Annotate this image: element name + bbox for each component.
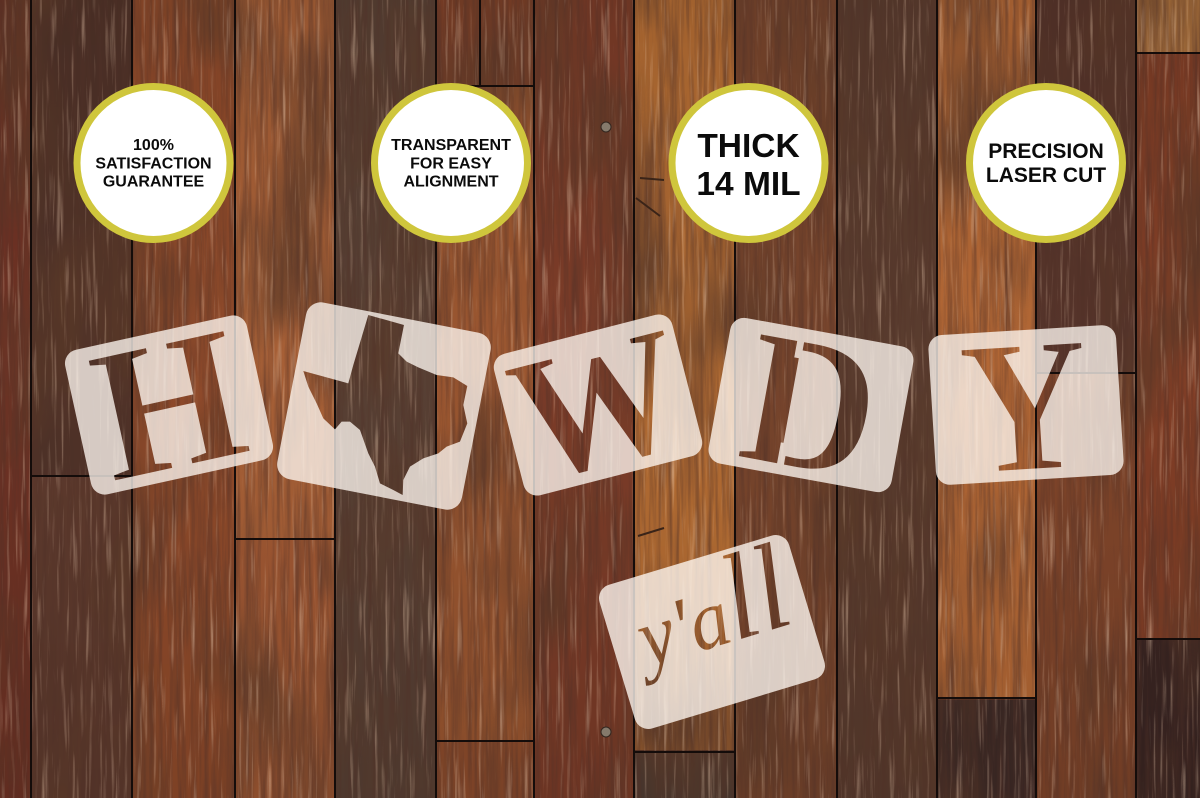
badge: 100% satisfaction guarantee: 100% [133,137,174,154]
badge: thick 14 mil: 14 MIL [696,166,801,203]
badge: precision laser cut: PRECISION [988,140,1104,163]
stencil: Texas state shape [275,300,493,512]
screw top [601,122,611,132]
badge: precision laser cut: LASER CUT [986,164,1106,187]
badge: 100% satisfaction guarantee: GUARANTEE [103,174,204,190]
badge: precision laser cut [970,86,1122,240]
stencil: letter H [62,313,276,497]
badge: thick 14 mil: THICK [697,128,800,165]
stencil: y'all script [596,532,828,732]
badge: transparent for easy alignment: TRANSPARENT [391,137,511,154]
badge: 100% satisfaction guarantee: SATISFACTION [95,156,212,172]
badge: transparent for easy alignment: FOR EASY [410,156,492,172]
screw bottom [601,727,611,737]
badge: transparent for easy alignment: ALIGNMENT [403,174,499,190]
stencil: letter Y [928,324,1124,486]
stencil: letter W [491,311,705,499]
stencil: letter D [706,316,916,494]
badge: 100% satisfaction guarantee [77,86,230,240]
badge: transparent for easy alignment [374,86,528,240]
badge: thick 14 mil [672,86,825,240]
